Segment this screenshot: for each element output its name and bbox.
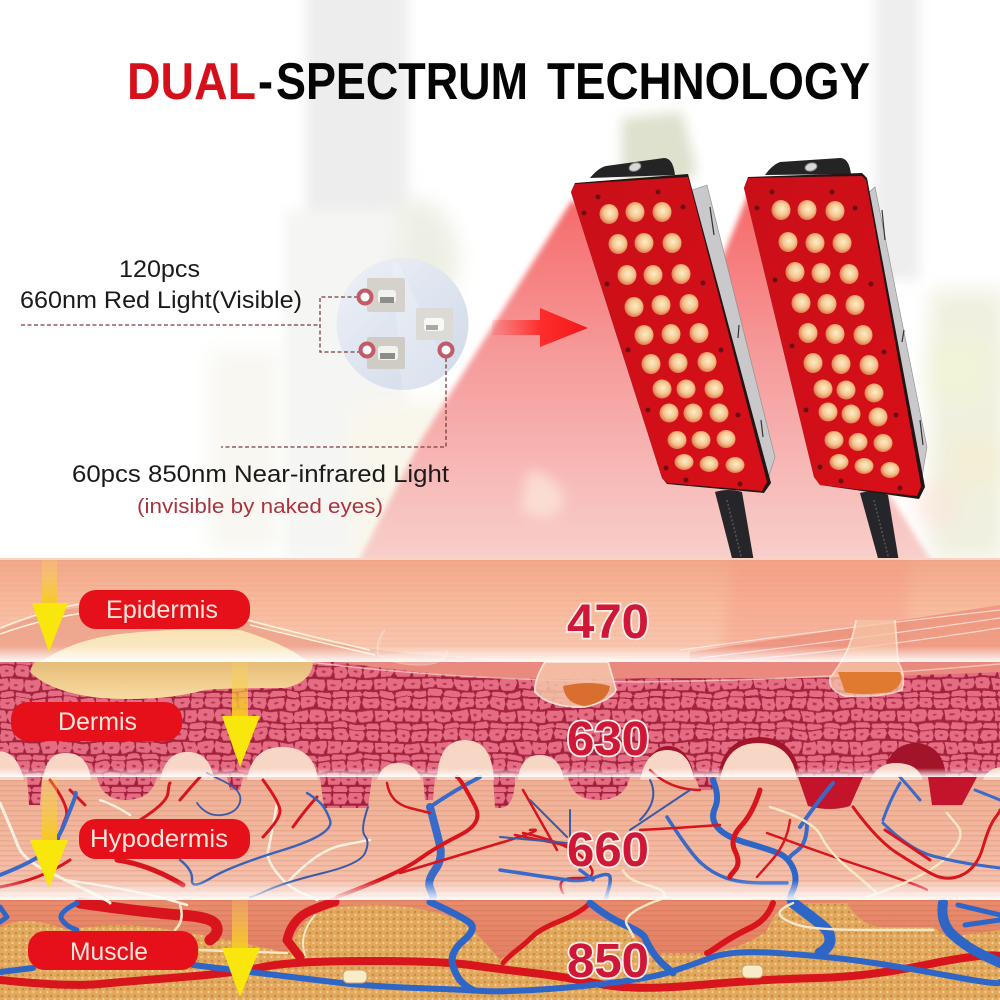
yellow arrow 1 <box>32 560 68 652</box>
arrow to lamps <box>492 308 588 347</box>
layer: dermis <box>0 662 1000 777</box>
deep red ridges <box>798 777 977 809</box>
chip: lower red LED <box>367 337 405 369</box>
lamp right <box>744 158 927 562</box>
blood vessels: middle layer <box>0 770 1000 905</box>
wavelength numbers <box>567 596 649 988</box>
background scene <box>0 0 1000 562</box>
panel <box>744 173 925 499</box>
pill: Dermis <box>11 702 182 741</box>
marker rings <box>358 290 452 356</box>
gooseneck <box>860 491 899 562</box>
label: 120pcs 660nm red light: 120pcs <box>119 256 200 283</box>
panel <box>571 174 771 493</box>
layer: epidermis <box>0 556 1000 664</box>
pill: Epidermis: Epidermis <box>106 596 218 624</box>
title: SPECTRUM <box>276 53 528 111</box>
layer: hypodermis <box>0 777 1000 901</box>
layer: muscle and fat <box>0 900 1000 1000</box>
yellow arrow 4 <box>222 900 260 997</box>
630 nm: 630 <box>567 713 649 766</box>
chip: upper red LED <box>367 278 405 312</box>
hair follicles <box>377 620 903 707</box>
screw holes <box>582 190 742 486</box>
label: 120pcs 660nm red light <box>20 256 302 314</box>
metal back <box>866 187 927 483</box>
title: DUAL <box>127 53 256 111</box>
screw holes <box>754 190 902 490</box>
pill: Muscle <box>28 931 198 970</box>
dermal ridges <box>27 777 717 808</box>
red light beams <box>358 190 932 562</box>
gooseneck <box>715 490 754 562</box>
label: 60pcs 850nm near-infrared: (invisible by naked eyes) <box>137 496 383 518</box>
pill: Hypodermis: Hypodermis <box>90 825 228 853</box>
white band fades <box>0 556 1000 900</box>
dark dermal arcs <box>642 737 946 778</box>
label: 120pcs 660nm red light: 660nm Red Light(Visible) <box>20 287 302 314</box>
fat deposit <box>30 628 313 699</box>
bracket <box>590 158 675 178</box>
label: 60pcs 850nm near-infrared <box>72 461 449 518</box>
lamp left <box>571 158 775 562</box>
pill: Epidermis <box>79 590 250 629</box>
yellow arrow 3 <box>30 777 68 888</box>
dashed leader lines <box>21 297 446 447</box>
title: TECHNOLOGY <box>547 53 870 111</box>
cream ducts <box>343 965 763 983</box>
chip: infrared LED <box>416 308 453 340</box>
skin cross-section <box>0 556 1000 1000</box>
label: 60pcs 850nm near-infrared: 60pcs 850nm Near-infrared Light <box>72 461 449 488</box>
pill: Hypodermis <box>79 819 250 859</box>
470 nm: 470 <box>567 596 649 649</box>
papillae bumps <box>0 740 1000 780</box>
metal back <box>692 185 775 482</box>
LED chip magnifier <box>336 258 468 390</box>
pill: Dermis: Dermis <box>58 708 137 736</box>
850 nm: 850 <box>567 935 649 988</box>
bracket <box>765 158 851 175</box>
title <box>127 53 870 111</box>
title: - <box>258 53 273 111</box>
blood vessels: lower layer <box>0 897 1000 991</box>
LEDs <box>772 200 900 478</box>
LEDs <box>600 202 744 473</box>
660 nm: 660 <box>567 824 649 877</box>
pill: Muscle: Muscle <box>70 938 148 966</box>
yellow arrow 2 <box>222 662 260 767</box>
